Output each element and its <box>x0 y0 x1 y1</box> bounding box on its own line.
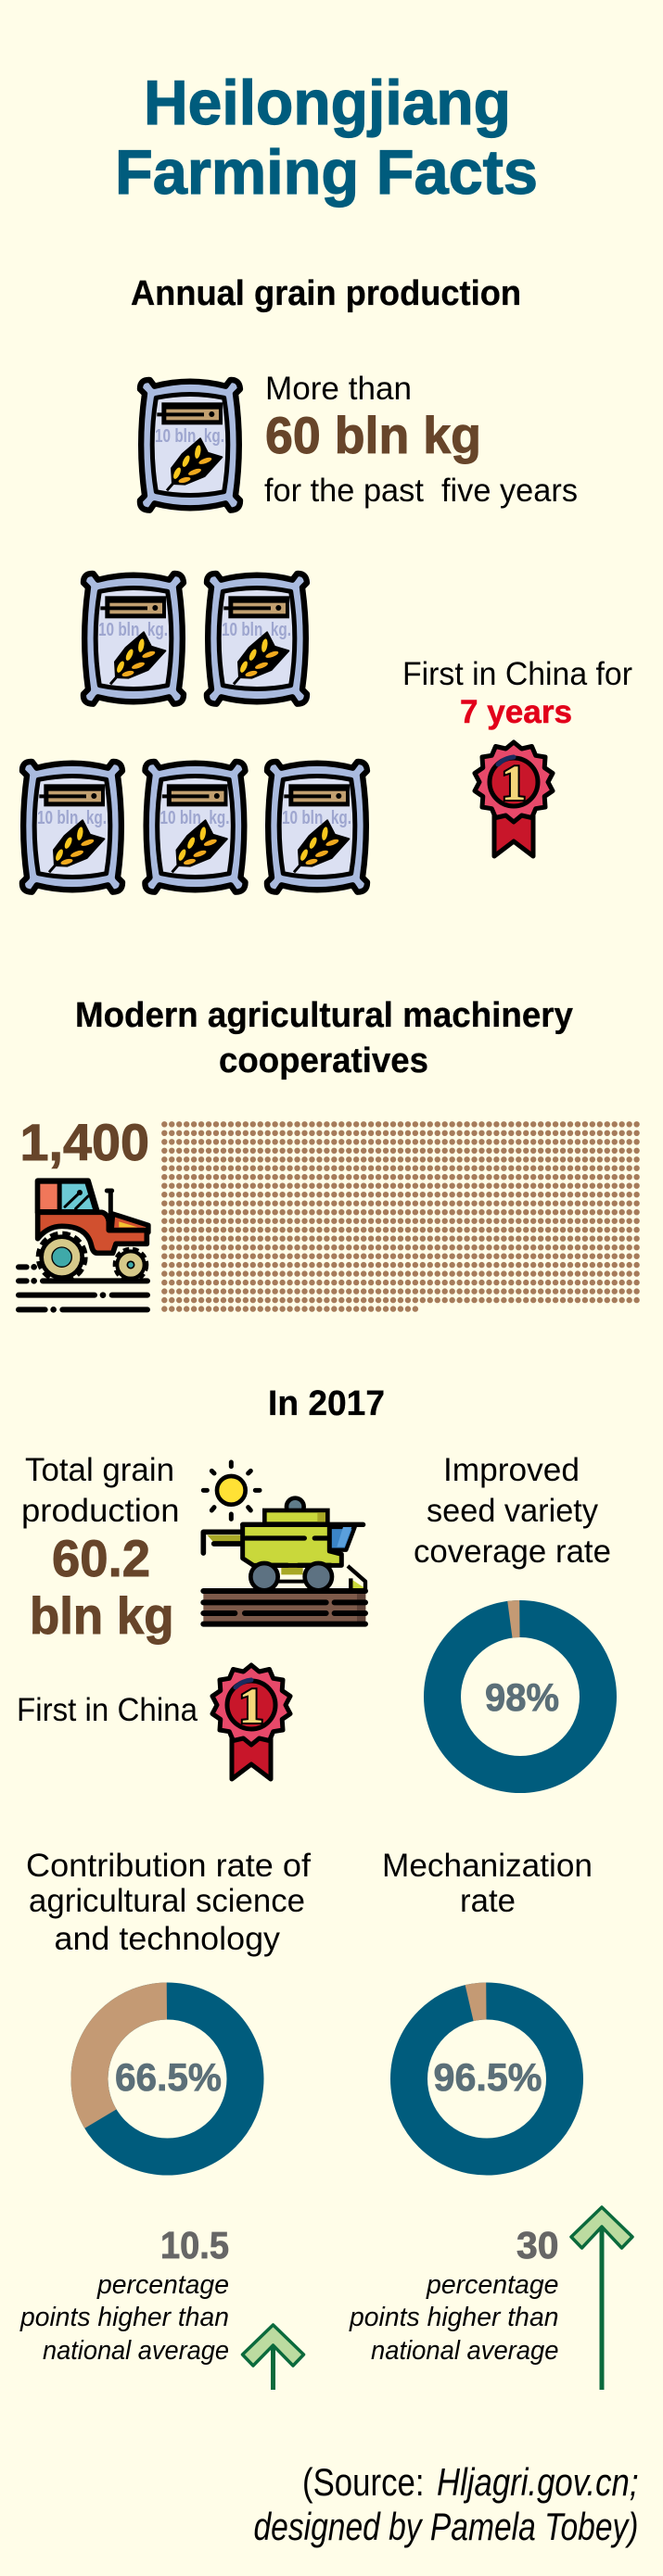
source credit: (Source: <box>302 2460 425 2504</box>
text: contribution rate: Contribution rate of <box>26 1848 311 1884</box>
text block: more than 60 bln kg: More than <box>265 371 412 407</box>
icon: first place medal <box>212 1665 290 1779</box>
text block: 30 percentage points: points higher than <box>349 2303 558 2332</box>
text block: 10.5 percentage points <box>19 2224 229 2366</box>
icon: sack 4: 10 bln kg. <box>159 808 230 828</box>
text block: 10.5 percentage points: 10.5 <box>160 2224 229 2267</box>
icon: sack 3 <box>22 762 122 892</box>
text block: 30 percentage points: percentage <box>426 2270 558 2300</box>
heading: annual grain production: Annual grain production <box>131 274 521 313</box>
text: contribution rate: agricultural science <box>29 1883 305 1919</box>
text block: total grain production 60.2 bln kg <box>21 1452 180 1645</box>
text block: more than 60 bln kg: for the past five years <box>264 473 578 509</box>
text block: 30 percentage points: 30 <box>516 2224 558 2267</box>
icon: first place medal <box>475 742 553 856</box>
icon: sack 2 <box>207 574 307 704</box>
text: mechanization rate: rate <box>460 1883 516 1919</box>
heading: machinery cooperatives <box>75 996 573 1080</box>
text block: 30 percentage points: national average <box>371 2336 558 2366</box>
text block: total grain production 60.2 bln kg: 60.2 <box>52 1529 150 1587</box>
icon: sack 4 <box>145 762 245 892</box>
text: contribution rate: and technology <box>54 1921 281 1957</box>
icon: grain sack <box>140 380 240 511</box>
icon: first place medal: 1 <box>239 1678 263 1734</box>
icon: sack 1 <box>83 574 184 704</box>
icon: sun and combine harvester <box>203 1462 365 1624</box>
text block: more than 60 bln kg: 60 bln kg <box>265 406 481 464</box>
text: improved seed variety coverage rate: Improved <box>443 1452 580 1488</box>
number: 1,400: 1,400 <box>20 1113 149 1171</box>
text block: 10.5 percentage points: national average <box>43 2336 229 2366</box>
text block: 30 percentage points <box>349 2224 558 2366</box>
dot chart: 1,400 cooperatives <box>164 1124 637 1309</box>
title: Farming Facts <box>115 137 538 208</box>
arrow: small rise <box>243 2325 304 2390</box>
text: mechanization rate <box>382 1848 593 1919</box>
icon: sack 5 <box>267 762 367 892</box>
title: Heilongjiang <box>144 68 511 138</box>
icon: sack 2: 10 bln kg. <box>222 620 291 640</box>
donut chart: 96.5%: 96.5% <box>434 2055 542 2099</box>
heading: machinery cooperatives: Modern agricultural machinery <box>75 996 573 1035</box>
text block: total grain production 60.2 bln kg: bln kg <box>30 1586 174 1645</box>
text: mechanization rate: Mechanization <box>382 1848 593 1884</box>
text block: total grain production 60.2 bln kg: production <box>21 1493 180 1529</box>
pictogram: five sacks, each 10 bln kg <box>22 574 367 892</box>
text: improved seed variety coverage rate <box>414 1452 611 1570</box>
source credit <box>254 2460 638 2548</box>
icon: first place medal: 1 <box>501 755 527 811</box>
donut chart: 98%: 98% <box>485 1675 559 1719</box>
text: contribution rate <box>26 1848 311 1957</box>
callout: first in China for 7 years: First in China for <box>402 656 632 692</box>
callout: first in China for 7 years <box>402 656 632 730</box>
arrow: large rise <box>571 2207 632 2390</box>
icon: sack 1: 10 bln kg. <box>98 620 168 640</box>
icon: sack 3: 10 bln kg. <box>37 808 107 828</box>
text block: 10.5 percentage points: percentage <box>96 2270 229 2300</box>
icon: tractor <box>19 1181 148 1313</box>
text block: total grain production 60.2 bln kg: Total grain <box>25 1452 174 1488</box>
donut chart: 66.5% <box>89 2001 245 2157</box>
donut chart: 96.5% <box>409 2001 565 2157</box>
heading: in 2017: In 2017 <box>268 1384 385 1423</box>
text: improved seed variety coverage rate: seed variety <box>427 1493 598 1529</box>
callout: first in China for 7 years: 7 years <box>460 694 572 730</box>
icon: grain sack: 10 bln kg. <box>155 426 224 447</box>
text: improved seed variety coverage rate: coverage rate <box>414 1534 611 1570</box>
text block: 10.5 percentage points: points higher than <box>19 2303 229 2332</box>
heading: machinery cooperatives: cooperatives <box>219 1042 428 1080</box>
title <box>115 68 538 208</box>
text: first in China: First in China <box>17 1692 198 1728</box>
text block: more than 60 bln kg <box>264 371 578 509</box>
icon: sack 5: 10 bln kg. <box>282 808 351 828</box>
donut chart: 66.5%: 66.5% <box>115 2055 222 2099</box>
donut chart: 98% <box>442 1619 598 1774</box>
